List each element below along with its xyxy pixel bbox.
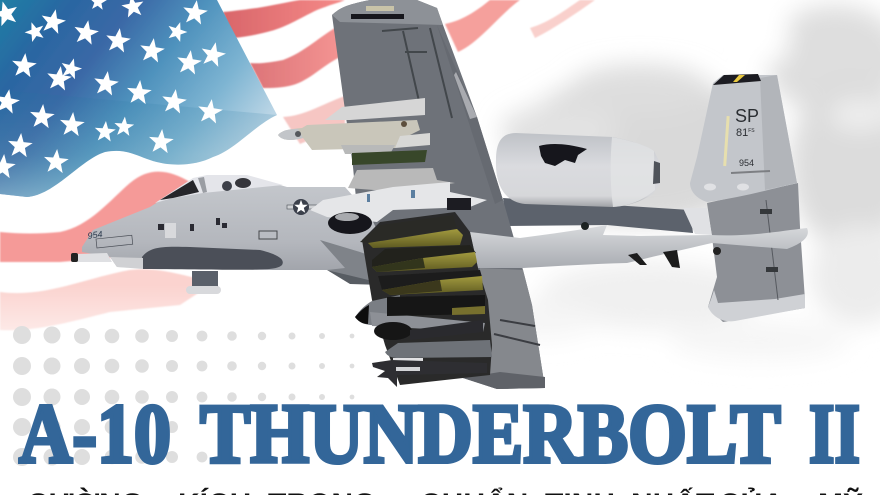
bomb one <box>360 215 463 248</box>
gun barrel <box>71 253 112 262</box>
title: A-10 <box>19 387 171 481</box>
fuselage <box>82 175 420 285</box>
flag stripes <box>0 0 595 330</box>
nose gear pod <box>186 271 221 294</box>
white rack <box>348 168 455 192</box>
American flag background <box>0 0 595 330</box>
engine nacelle <box>496 133 660 207</box>
title: THUNDERBOLT <box>200 387 781 481</box>
tail boom <box>470 222 808 268</box>
dot grid <box>13 326 354 466</box>
nose number: 954 <box>87 229 103 241</box>
clouds <box>495 5 880 360</box>
tail markings: SP <box>735 106 759 126</box>
lower missiles <box>372 340 492 387</box>
dark backing behind bomb racks <box>362 212 492 385</box>
upper wing pylon <box>325 98 425 120</box>
flag stars <box>0 0 228 179</box>
roundel <box>287 199 317 215</box>
targeting pod <box>278 120 430 154</box>
tail fin upper section: 954 <box>739 158 754 168</box>
wing pod and landing gear <box>310 182 487 234</box>
tail fin upper section: FS <box>748 128 755 134</box>
pylon under engine <box>503 198 693 233</box>
title: II <box>809 387 860 481</box>
flag blue canton <box>0 0 277 197</box>
main wing <box>332 0 545 389</box>
olive bomb on upper wing <box>352 150 427 165</box>
black-nosed pod with rack <box>355 295 485 340</box>
title <box>19 387 860 481</box>
tail fin upper section <box>690 74 797 202</box>
A-10 aircraft <box>71 0 808 389</box>
canopy <box>155 175 283 203</box>
tail fin upper section: 81 <box>736 127 748 139</box>
subtitle cropped at bottom edge <box>27 487 863 495</box>
bomb three <box>378 270 483 295</box>
tail fin lower section <box>707 183 805 322</box>
lower fade to white <box>0 285 340 335</box>
bomb two <box>372 245 477 272</box>
